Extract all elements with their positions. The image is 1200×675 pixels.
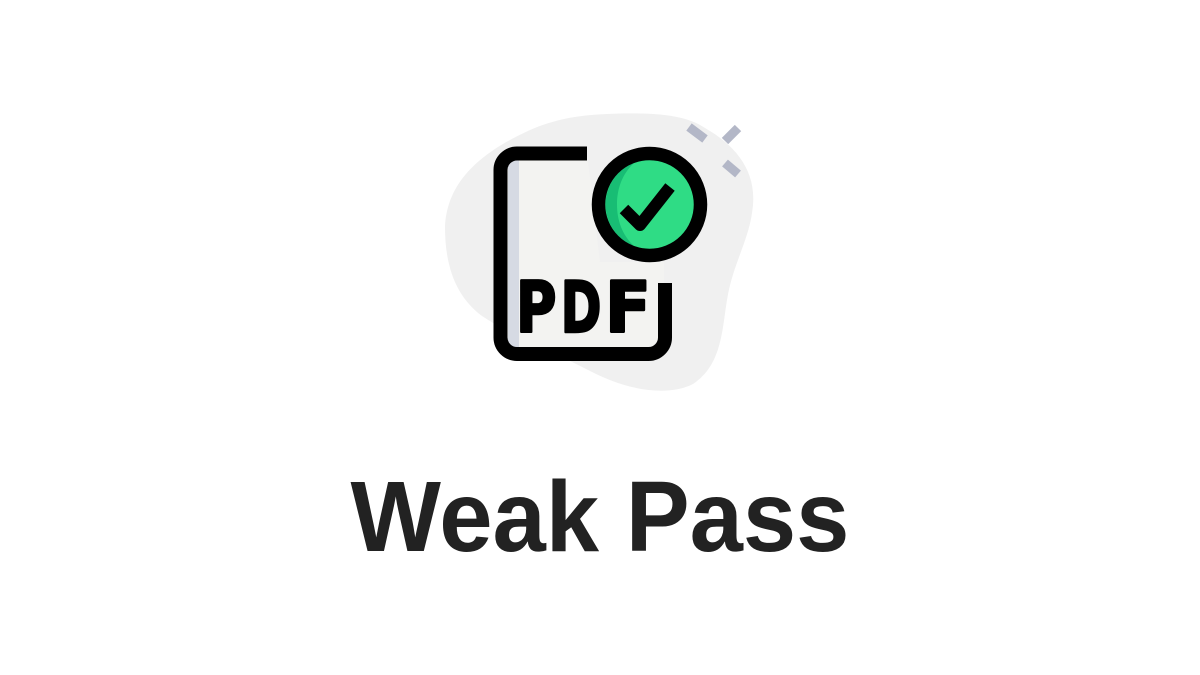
title: Weak Pass: [351, 461, 849, 573]
PDF label: [516, 266, 651, 349]
document page: [500, 154, 665, 354]
sparkle dashes: [689, 127, 738, 174]
PDF label: F: [605, 268, 651, 349]
check badge: [598, 154, 700, 256]
PDF label: P: [516, 266, 557, 348]
icon background blob: [445, 113, 753, 391]
icon: PDF document with check mark: [445, 113, 753, 391]
PDF label: D: [561, 268, 601, 349]
